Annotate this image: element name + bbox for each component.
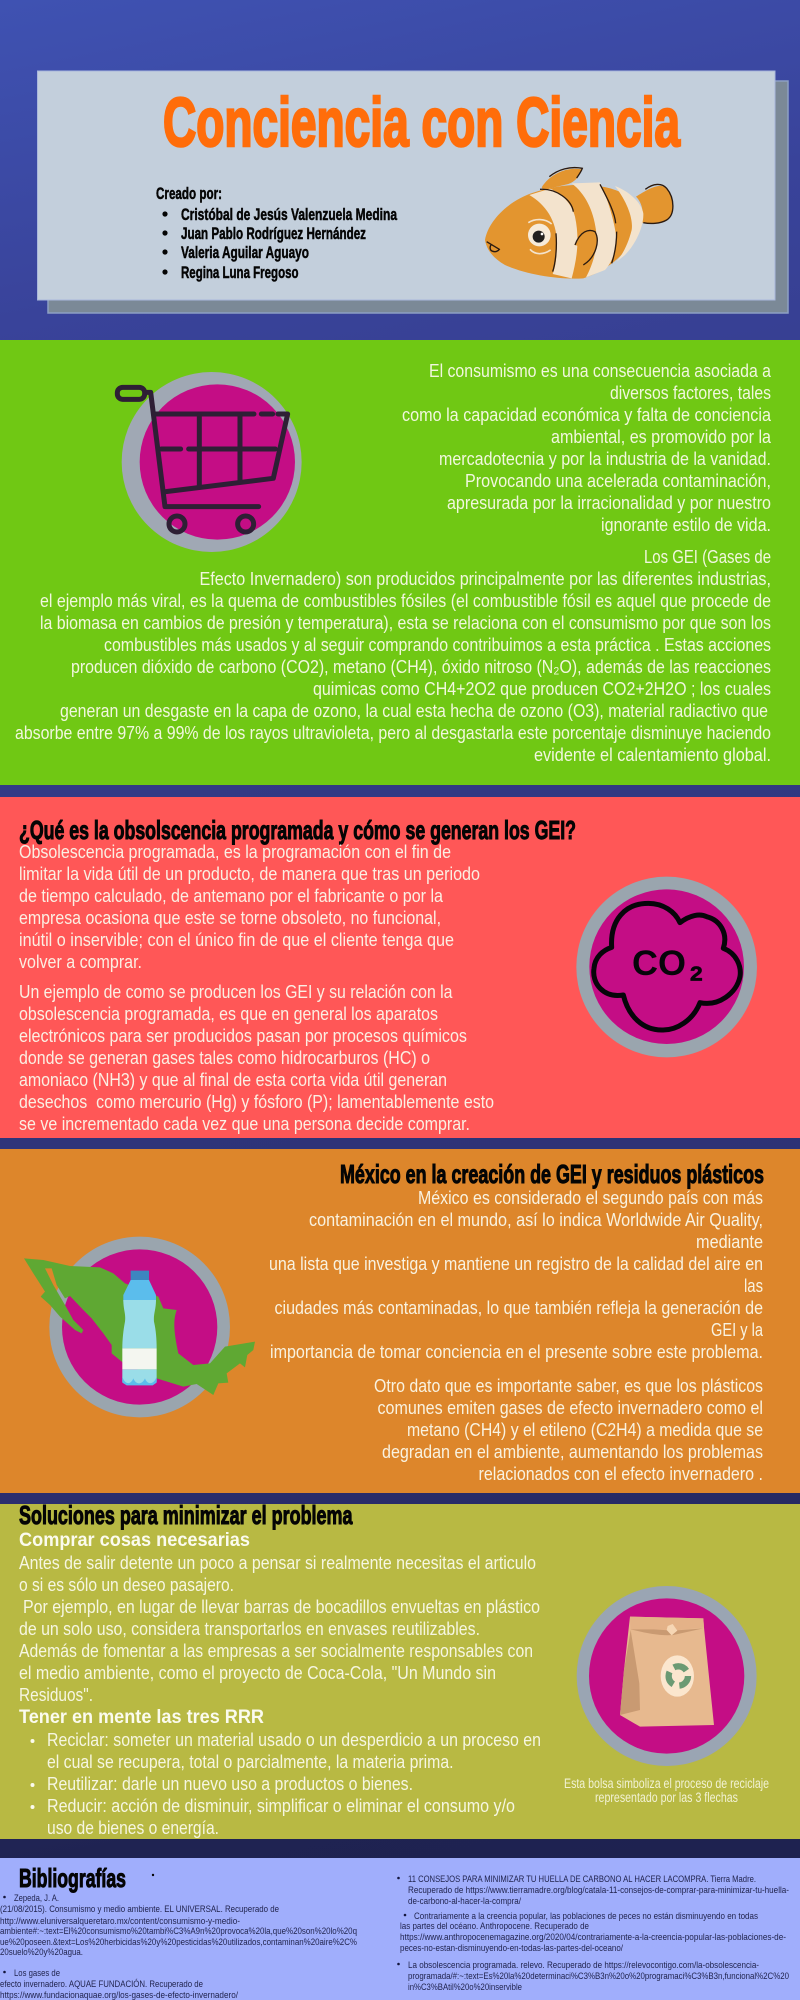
text block: definicion [19,841,480,972]
references: left column: (21/08/2015). Consumismo y medio ambiente. EL UNIVERSAL. Recuperado de [0,1904,279,1915]
references: left column: 20suelo%20y%20agua. [0,1947,83,1958]
references: right column: peces-no-estan-disminuyendo-en-todas-las-partes-del-oceano/ [400,1943,623,1954]
authors list [156,184,397,282]
text block: consumismo: ignorante estilo de vida. [601,514,771,535]
references: left column: Zepeda, J. A. [14,1893,59,1904]
text block: ejemplo: desechos como mercurio (Hg) y fósforo (P); lamentablemente esto [19,1091,494,1112]
text block: comprar: de un solo uso, considera transportarlos en envases reutilizables. [19,1618,480,1639]
text block: comprar: el medio ambiente, como el proyecto de Coca-Cola, "Un Mundo sin [19,1662,496,1683]
text block: definicion: de tiempo calculado, de antemano por el fabricante o por la [19,885,444,906]
list: tres RRR: uso de bienes o energía. [47,1817,219,1838]
references: right column: de-carbono-al-hacer-la-compra/ [408,1896,521,1907]
text block: consumismo [402,360,772,535]
text block: comprar: Por ejemplo, en lugar de llevar barras de bocadillos envueltas en plástico [23,1596,540,1617]
icon: clownfish [485,168,673,279]
references: right column: las partes del océano. Anthropocene. Recuperado de [400,1921,589,1932]
panel: soluciones [0,1500,800,1839]
text block: ejemplo: obsolescencia programada, es que en general los aparatos [19,1003,438,1024]
text block: ejemplo: electrónicos para ser producidos pasan por procesos químicos [19,1025,467,1046]
text block: definicion: Obsolescencia programada, es la programación con el fin de [19,841,451,862]
text block: GEI: evidente el calentamiento global. [534,744,771,765]
list: tres RRR [30,1729,541,1838]
panel: Mexico [0,1149,800,1493]
text block: Mexico contaminacion: mediante [696,1231,763,1252]
text block: comprar: Además de fomentar a las empresas a ser socialmente responsables con [19,1640,533,1661]
text block: Mexico contaminacion: GEI y la [711,1319,764,1340]
references: left column: efecto invernadero. AQUAE FUNDACIÓN. Recuperado de [0,1979,203,1990]
references: left column: http://www.eluniversalqueretaro.mx/content/consumismo-y-medio- [0,1916,240,1927]
text block: comprar: Residuos". [19,1684,93,1705]
caption: bag [564,1776,769,1805]
text block: ejemplo: se ve incrementado cada vez que una persona decide comprar. [19,1113,470,1134]
decorative dot [152,1874,154,1876]
authors list: Regina Luna Fregoso [181,263,298,282]
text block: consumismo: diversos factores, tales [610,382,771,403]
list: tres RRR: el cual se recupera, total o parcialmente, la materia prima. [47,1751,454,1772]
text block: plasticos: relacionados con el efecto invernadero . [478,1463,763,1484]
text block: definicion: volver a comprar. [19,951,142,972]
list: tres RRR: Reciclar: someter un material usado o un desperdicio a un proceso en [47,1729,541,1750]
subheading: comprar: Comprar cosas necesarias [19,1529,250,1551]
text block: comprar [19,1552,540,1705]
references: left column: ambiente#:~:text=El%20consumismo%20tambi%C3%A9n%20provoca%20la,que%20son%20lo%20q [0,1926,357,1937]
icon: CO2 cloud: CO [632,944,686,983]
icon: shopping cart [117,372,302,552]
text block: definicion: empresa ocasiona que este se torne obsoleto, no funcional, [19,907,441,928]
text block: ejemplo: donde se generan gases tales como hidrocarburos (HC) o [19,1047,430,1068]
references: left column: Los gases de [14,1968,60,1979]
panel: obsolescencia [0,797,800,1138]
subheading: RRR: Tener en mente las tres RRR [19,1706,264,1728]
references: left column: ue%20poseen.&text=Los%20herbicidas%20y%20pesticidas%20utilizados,contaminan%20aire%2C% [0,1937,357,1948]
text block: GEI: Los GEI (Gases de [644,546,771,567]
authors list: Cristóbal de Jesús Valenzuela Medina [181,205,397,224]
references: right column: in%C3%BAtil%20o%20inservible [408,1982,522,1993]
icon: recycled paper bag [577,1586,757,1766]
text block: consumismo: ambiental, es promovido por la [551,426,772,447]
icon: Mexico map and bottle [24,1237,255,1417]
text block: ejemplo: amoniaco (NH3) y que al final de esta corta vida útil generan [19,1069,447,1090]
text block: Mexico contaminacion [269,1187,764,1362]
text block: plasticos [374,1375,763,1484]
panel: consumismo [0,340,800,785]
references: right column [397,1874,789,1993]
panel: bibliografias [0,1858,800,2000]
text block: ejemplo [19,981,494,1134]
text block: Mexico contaminacion: las [744,1275,763,1296]
authors list: Valeria Aguilar Aguayo [181,243,309,262]
heading: bibliografias: Bibliografías [19,1863,126,1893]
text block: definicion: limitar la vida útil de un producto, de manera que tras un periodo [19,863,480,884]
icon: CO2 cloud [576,877,757,1057]
heading: soluciones: Soluciones para minimizar el problema [19,1500,353,1530]
list: tres RRR: Reducir: acción de disminuir, simplificar o eliminar el consumo y/o [47,1795,515,1816]
authors list: Creado por: [156,184,222,203]
icon: CO2 cloud: 2 [690,964,703,986]
list: tres RRR: Reutilizar: darle un nuevo uso a productos o bienes. [47,1773,413,1794]
text block: GEI [15,546,771,765]
text block: comprar: o si es sólo un deseo pasajero. [19,1574,234,1595]
text block: comprar: Antes de salir detente un poco a pensar si realmente necesitas el articulo [19,1552,536,1573]
references: left column [0,1893,357,2000]
caption: bag: representado por las 3 flechas [595,1790,738,1805]
text block: definicion: inútil o inservible; con el único fin de que el cliente tenga que [19,929,454,950]
authors list: Juan Pablo Rodríguez Hernández [181,224,366,243]
panel: header [38,71,788,313]
text block: ejemplo: Un ejemplo de como se producen los GEI y su relación con la [19,981,453,1002]
